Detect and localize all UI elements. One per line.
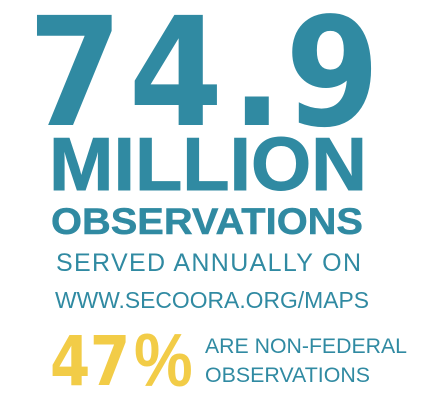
statistic: 47 percent: 47 <box>50 322 130 402</box>
statistic: 47 percent: % <box>134 318 193 402</box>
text: website url: WWW.SECOORA.ORG/MAPS <box>55 287 369 313</box>
caption: non-federal observations: OBSERVATIONS <box>205 364 370 387</box>
statistic: 47 percent <box>50 318 193 402</box>
heading: million: MILLION <box>49 122 367 206</box>
caption: non-federal observations <box>205 335 407 387</box>
text: served annually on: SERVED ANNUALLY ON <box>56 249 361 277</box>
heading: observations: OBSERVATIONS <box>51 201 363 242</box>
caption: non-federal observations: ARE NON-FEDERAL <box>205 335 407 358</box>
